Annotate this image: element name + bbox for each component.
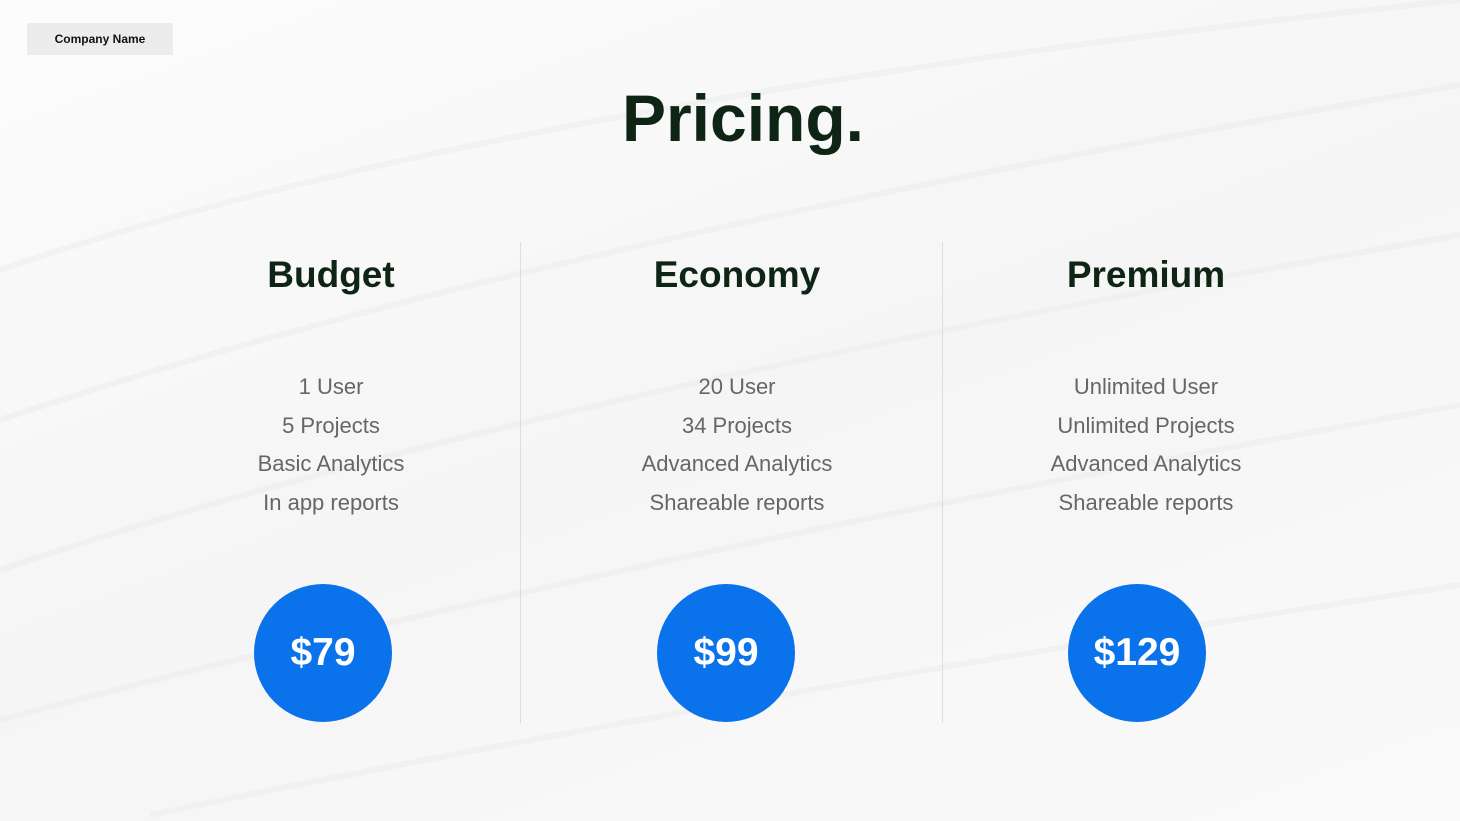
panel: budget <box>258 254 404 514</box>
features <box>642 374 832 514</box>
features: Advanced Analytics <box>1051 451 1241 476</box>
features: In app reports <box>263 490 399 514</box>
price: budget <box>254 584 392 722</box>
features: Shareable reports <box>650 490 824 514</box>
divider <box>520 242 521 723</box>
divider <box>942 242 943 723</box>
company name badge <box>27 23 173 55</box>
price: economy <box>657 584 795 722</box>
features: Advanced Analytics <box>642 451 832 476</box>
features <box>258 374 404 514</box>
features: Shareable reports <box>1059 490 1233 514</box>
features <box>1050 374 1241 514</box>
features: 20 User <box>698 374 776 399</box>
features: Unlimited User <box>1074 374 1218 399</box>
features: 1 User <box>299 374 363 399</box>
company name badge: Company Name <box>55 32 145 46</box>
panel: premium <box>1050 254 1241 514</box>
heading: Economy <box>654 254 820 295</box>
price: premium: $129 <box>1094 631 1180 674</box>
price: premium <box>1068 584 1206 722</box>
price: economy: $99 <box>693 631 759 674</box>
features: 34 Projects <box>682 412 792 438</box>
features: 5 Projects <box>282 412 380 438</box>
price: budget: $79 <box>290 631 356 674</box>
panel: economy <box>642 254 832 514</box>
heading: Premium <box>1067 254 1225 295</box>
heading: Budget <box>267 254 395 295</box>
title: Pricing. <box>622 81 864 155</box>
features: Basic Analytics <box>258 451 404 476</box>
features: Unlimited Projects <box>1057 412 1235 438</box>
